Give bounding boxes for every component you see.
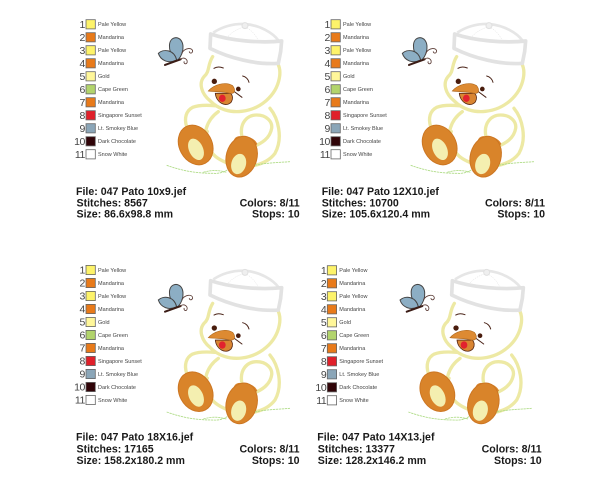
file details 10x9: Stitches: 8567 [76,198,148,210]
colour legend 10x9: 3 [80,45,86,57]
illustration: sailor duck 14x13 [408,269,532,427]
colour legend 14x13: 10 [315,382,327,394]
colour legend 10x9: Pale Yellow [98,22,126,28]
colour legend 12x10 [319,19,387,161]
colour legend 10x9: 11 [75,149,86,161]
colour legend 14x13: Lt. Smokey Blue [339,372,379,378]
colour legend 18x16: Pale Yellow [98,268,126,274]
colour legend 12x10: 5 [325,71,331,83]
colour legend 14x13: 8 [321,356,327,368]
colour legend 12x10: Mandarina [343,35,370,41]
colour legend 14x13: Pale Yellow [339,268,367,274]
colour legend 12x10: 1 [325,19,331,31]
colour legend 18x16: 2 [80,278,86,290]
colour legend 18x16: 4 [80,304,86,316]
colour legend 10x9: Mandarina [98,100,125,106]
file details 14x13: Stops: 10 [494,455,542,467]
colour legend 10x9 [74,19,142,161]
file details 18x16: Stitches: 17165 [76,444,154,456]
colour legend 14x13: 5 [321,317,327,329]
icon: butterfly 10x9 [158,38,193,65]
colour legend 10x9: 6 [80,84,86,96]
colour legend 10x9: Singapore Sunset [98,113,142,119]
icon: butterfly 12x10 [402,38,437,65]
colour legend 12x10: Pale Yellow [343,48,371,54]
file details 18x16: Size: 158.2x180.2 mm [76,455,185,467]
colour legend 12x10: 9 [325,123,331,135]
colour legend 10x9: 1 [80,19,86,31]
colour legend 18x16: Lt. Smokey Blue [98,372,138,378]
illustration: sailor duck 12x10 [411,23,534,181]
colour legend 14x13: 7 [321,343,327,355]
colour legend 14x13: Cape Green [339,333,369,339]
icon: butterfly 18x16 [158,284,193,312]
colour legend 12x10: 3 [325,45,331,57]
colour legend 14x13: Snow White [339,398,369,404]
colour legend 12x10: Dark Chocolate [343,139,381,145]
colour legend 12x10: Snow White [343,152,372,158]
file details 12x10: Colors: 8/11 [485,198,545,210]
colour legend 10x9: 7 [80,97,86,109]
colour legend 18x16: Mandarina [98,281,125,287]
colour legend 10x9: Pale Yellow [98,48,126,54]
colour legend 18x16: 3 [80,291,86,303]
colour legend 10x9: Lt. Smokey Blue [98,126,138,132]
file details 18x16: File: 047 Pato 18X16.jef [76,432,194,444]
colour legend 18x16: Mandarina [98,346,125,352]
colour legend 14x13: Singapore Sunset [339,359,383,365]
colour legend 14x13: 1 [321,265,327,277]
colour legend 18x16: Pale Yellow [98,294,126,300]
colour legend 14x13: Pale Yellow [339,294,367,300]
colour legend 12x10: Cape Green [343,87,373,93]
colour legend 10x9: 8 [80,110,86,122]
file details 18x16 [76,432,300,467]
colour legend 14x13: Dark Chocolate [339,385,377,391]
colour legend 18x16: Mandarina [98,307,125,313]
file details 14x13: Stitches: 13377 [318,444,395,456]
colour legend 18x16: Dark Chocolate [98,385,136,391]
file details 12x10: Size: 105.6x120.4 mm [322,209,430,221]
file details 14x13: File: 047 Pato 14X13.jef [317,432,435,444]
colour legend 10x9: 2 [80,32,86,44]
colour legend 10x9: Mandarina [98,61,125,67]
colour legend 18x16: Snow White [98,398,127,404]
colour legend 18x16: 10 [74,382,86,394]
colour legend 12x10: 4 [325,58,331,70]
colour legend 12x10: Singapore Sunset [343,113,387,119]
colour legend 10x9: 10 [74,136,86,148]
colour legend 12x10: Gold [343,74,355,80]
colour legend 14x13: 3 [321,291,327,303]
file details 18x16: Stops: 10 [252,455,300,467]
file details 12x10: Stops: 10 [497,209,545,221]
colour legend 12x10: 6 [325,84,331,96]
colour legend 18x16: 5 [80,317,86,329]
colour legend 12x10: Lt. Smokey Blue [343,126,383,132]
colour legend 10x9: 4 [80,58,86,70]
colour legend 14x13: Mandarina [339,307,366,313]
file details 10x9: Stops: 10 [252,209,300,221]
colour legend 14x13: 11 [316,395,327,407]
file details 10x9: Colors: 8/11 [240,198,300,210]
colour legend 12x10: 2 [325,32,331,44]
colour legend 14x13: Gold [339,320,351,326]
colour legend 18x16: 9 [80,369,86,381]
colour legend 12x10: 10 [319,136,331,148]
colour legend 12x10: Mandarina [343,61,370,67]
file details 10x9: File: 047 Pato 10x9.jef [76,186,187,198]
file details 14x13: Colors: 8/11 [482,444,542,456]
colour legend 12x10: 11 [320,149,331,161]
colour legend 12x10: Mandarina [343,100,370,106]
colour legend 10x9: 5 [80,71,86,83]
file details 18x16: Colors: 8/11 [239,444,300,456]
file details 12x10: File: 047 Pato 12X10.jef [322,186,439,198]
colour legend 18x16: 1 [80,265,86,277]
colour legend 10x9: Gold [98,74,110,80]
colour legend 12x10: 8 [325,110,331,122]
colour legend 14x13: 9 [321,369,327,381]
panel: 10x9 design [74,19,300,221]
panel: 12x10 design [319,19,545,221]
colour legend 14x13: 2 [321,278,327,290]
colour legend 18x16: 8 [80,356,86,368]
colour legend 10x9: Dark Chocolate [98,139,136,145]
colour legend 12x10: 7 [325,97,331,109]
colour legend 10x9: Snow White [98,152,127,158]
colour legend 18x16: 6 [80,330,86,342]
colour legend 18x16: 11 [75,395,86,407]
file details 14x13: Size: 128.2x146.2 mm [318,455,426,467]
colour legend 14x13: Mandarina [339,281,366,287]
colour legend 10x9: 9 [80,123,86,135]
colour legend 18x16: Singapore Sunset [98,359,142,365]
colour legend 14x13: 4 [321,304,327,316]
illustration: sailor duck 18x16 [167,269,290,427]
icon: butterfly 14x13 [400,284,434,312]
colour legend 14x13: Mandarina [339,346,366,352]
colour legend 18x16 [74,265,142,407]
file details 10x9: Size: 86.6x98.8 mm [76,209,173,221]
colour legend 12x10: Pale Yellow [343,22,371,28]
colour legend 18x16: 7 [80,343,86,355]
colour legend 10x9: Cape Green [98,87,128,93]
file details 14x13 [317,432,542,467]
colour legend 10x9: Mandarina [98,35,125,41]
colour legend 18x16: Gold [98,320,110,326]
colour legend 14x13 [315,265,383,407]
file details 10x9 [76,186,300,221]
panel: 18x16 design [74,265,300,467]
file details 12x10 [322,186,545,221]
illustration: sailor duck 10x9 [167,23,290,181]
colour legend 18x16: Cape Green [98,333,128,339]
colour legend 14x13: 6 [321,330,327,342]
file details 12x10: Stitches: 10700 [322,198,399,210]
panel: 14x13 design [315,265,542,467]
